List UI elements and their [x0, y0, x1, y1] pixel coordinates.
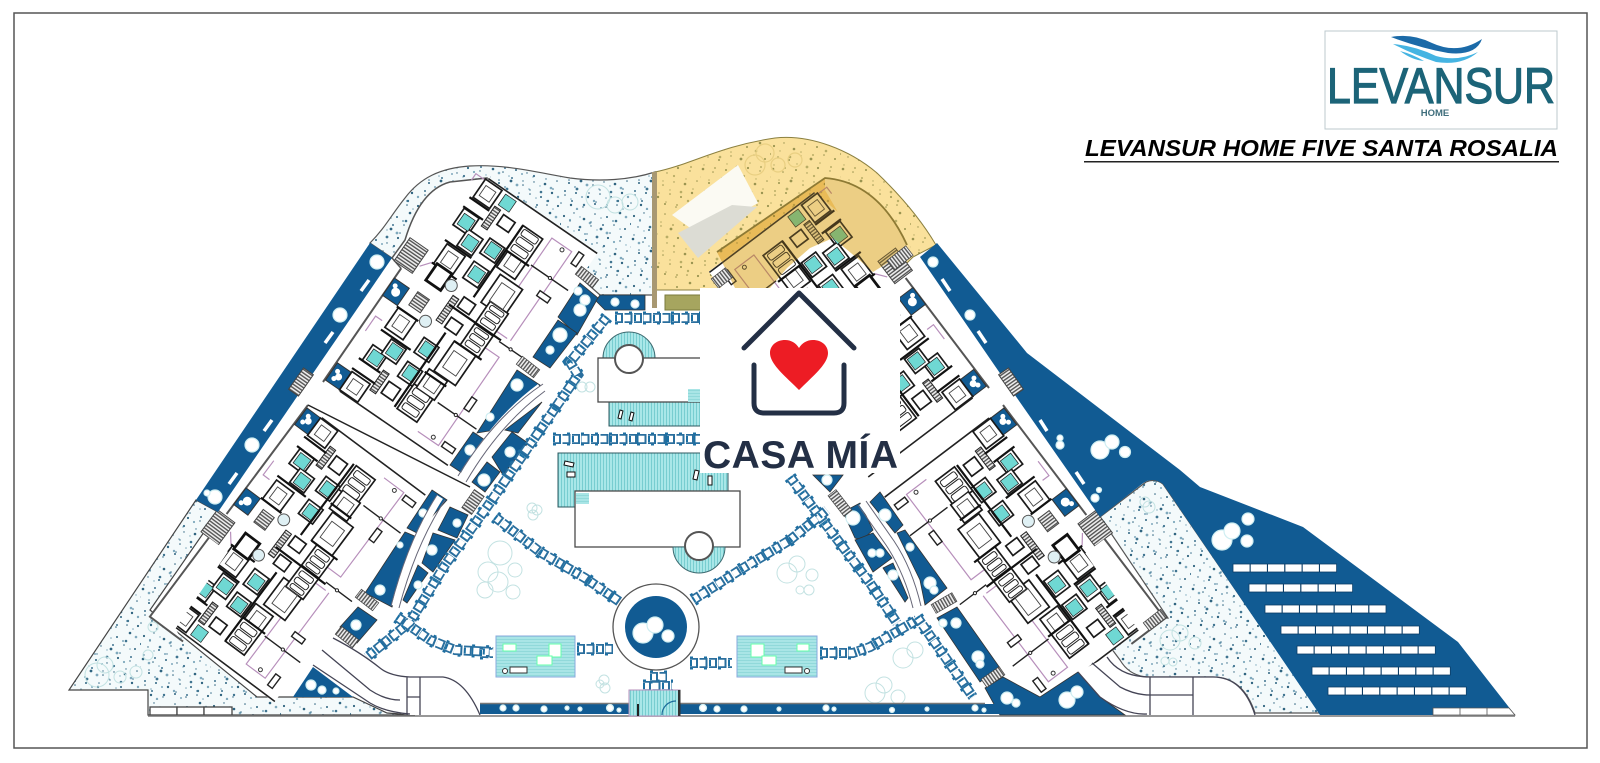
- private house base under tint: [825, 178, 907, 262]
- wordmark sub-line: HOME: [1421, 108, 1449, 119]
- apartment block: lower left: [142, 399, 430, 708]
- apartment block: upper left: [315, 160, 599, 470]
- title: LEVANSUR HOME FIVE SANTA ROSALIA: [1085, 135, 1558, 161]
- landscaping band: east with parking: [920, 243, 1515, 715]
- central roundabout: [613, 584, 699, 670]
- plaza garden trees and entry stairs: [335, 246, 1167, 708]
- main entrance: [629, 690, 680, 716]
- speckled garden: north-west: [370, 166, 655, 295]
- speckled garden: south-east: [1090, 480, 1320, 713]
- plaza gardens: east side: [813, 475, 1125, 715]
- yellow private plot: [655, 137, 936, 290]
- south road east: [1078, 657, 1255, 715]
- brand name: CASA MÍA: [703, 433, 898, 477]
- apartment block: upper right: [707, 173, 997, 482]
- logo: Levansur Home: [1325, 31, 1557, 129]
- site plan: [69, 137, 1515, 716]
- icon: waves: [1391, 36, 1482, 63]
- plot divider: [652, 172, 657, 308]
- apartment block: lower right: [879, 399, 1173, 712]
- curved walkways: [395, 387, 917, 607]
- upper pool deck and building: [598, 332, 709, 426]
- access road north-west: [392, 178, 500, 290]
- parking rows: [1233, 564, 1515, 715]
- east terrace: [737, 636, 817, 677]
- ghost building on plot: [672, 165, 758, 258]
- stepping stone paths: [367, 317, 973, 697]
- yellow tint on private house: [717, 178, 907, 288]
- yellow plot tree outlines: [745, 144, 802, 175]
- plaza tree outlines: [85, 185, 1201, 704]
- landscaping band: west: [196, 243, 392, 512]
- south road west: [293, 638, 480, 715]
- plaza gardens: west side: [340, 283, 645, 643]
- icon: house with heart: [744, 293, 854, 413]
- wordmark: LEVANSUR: [1327, 58, 1555, 114]
- logo: Casa Mía: [700, 288, 900, 477]
- stairs on west band: [289, 368, 313, 396]
- west terrace: [496, 636, 575, 677]
- lower pool deck and building: [558, 453, 740, 573]
- boundary line between west blocks: [308, 405, 470, 487]
- parking boxes south-west: [150, 707, 232, 715]
- southern landscaping strip: [148, 704, 1515, 716]
- speckled garden: south-west: [69, 500, 415, 715]
- olive planter on plot: [665, 295, 701, 310]
